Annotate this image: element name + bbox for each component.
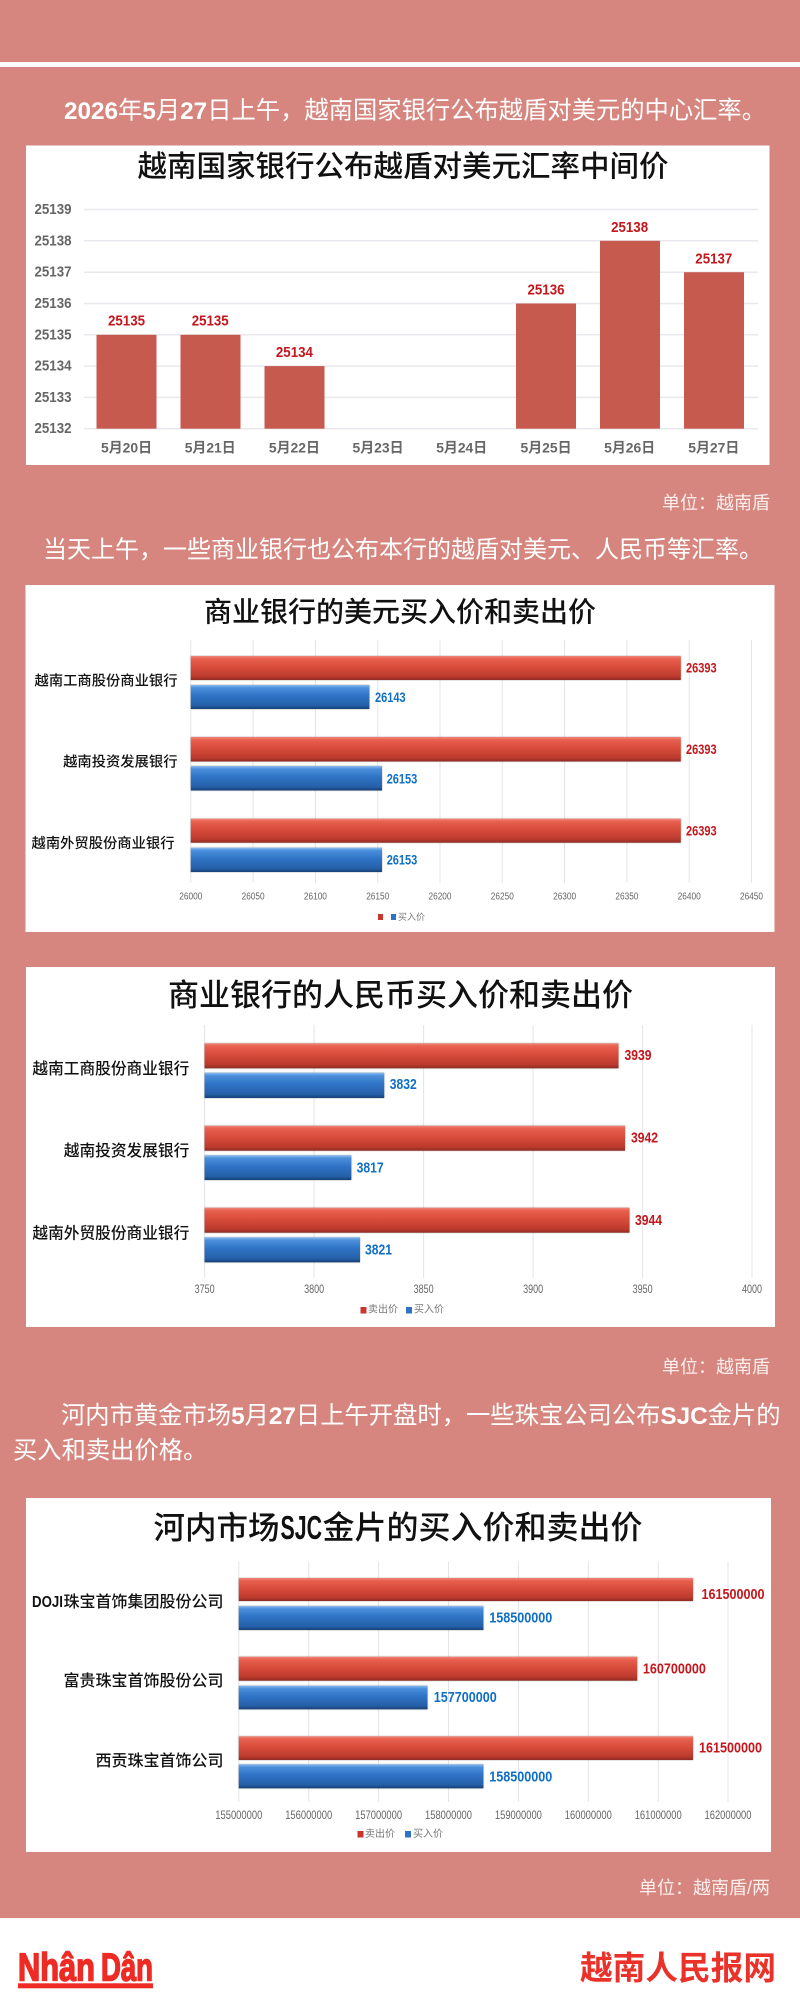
vertical grid lines and x axis: 158000000: [425, 1808, 472, 1822]
vertical grid lines and x axis: 26150: [366, 892, 390, 902]
vertical grid lines and x axis: 161000000: [635, 1808, 682, 1822]
heading: chart 4 title: 河内市场: [154, 1510, 280, 1546]
row: Vietcombank RMB: 3944: [635, 1213, 662, 1229]
vertical grid lines and x axis: 3950: [633, 1282, 653, 1296]
vertical grid lines and x axis: 26000: [179, 892, 203, 902]
vertical grid lines and x axis: 162000000: [704, 1808, 752, 1822]
row: Vietcombank USD: 26393: [686, 824, 717, 838]
panel: SJC gold buy and sell chart: [26, 1498, 771, 1852]
panel: central rate column chart: [26, 146, 770, 465]
heading: chart 1 title: 越南国家银行公布越盾对美元汇率中间价: [137, 150, 669, 184]
row: VietinBank RMB: 越南工商股份商业银行: [32, 1060, 190, 1078]
row: DOJI gold: 珠宝首饰集团股份公司: [63, 1592, 224, 1611]
row: VietinBank RMB: 3939: [624, 1048, 652, 1064]
y axis with grid lines: 25137: [34, 264, 72, 281]
row: Phu Quy gold: 157700000: [434, 1690, 497, 1706]
row: Vietcombank USD: 26153: [387, 852, 418, 868]
panel: USD buy and sell chart: [26, 585, 774, 932]
unit note 3: 单位：越南盾/两: [639, 1878, 770, 1898]
row: BIDV USD: [63, 737, 717, 790]
vertical grid lines and x axis: 26300: [553, 892, 576, 902]
row: VietinBank RMB: 3832: [390, 1077, 417, 1093]
heading: chart 3 title: 商业银行的人民币买入价和卖出价: [168, 978, 633, 1013]
row: Saigon Jewelry gold: 158500000: [489, 1769, 552, 1785]
unit note 1: 单位：越南盾: [662, 493, 770, 513]
row: Phu Quy gold: 160700000: [643, 1661, 706, 1677]
vertical grid lines and x axis: 160000000: [565, 1808, 612, 1822]
x axis dates: 5月23日: [352, 440, 404, 456]
vertical grid lines and x axis: 3850: [414, 1282, 434, 1296]
row: DOJI gold: 161500000: [702, 1587, 764, 1603]
vertical grid lines and x axis: 26100: [304, 892, 327, 902]
row: BIDV USD: 26153: [387, 772, 418, 786]
row: Vietcombank USD: [32, 819, 717, 872]
bars and value labels: 25138: [611, 219, 648, 236]
row: Vietcombank USD: 越南外贸股份商业银行: [32, 835, 174, 852]
row: VietinBank RMB: [32, 1043, 651, 1098]
vertical grid lines and x axis: 157000000: [355, 1808, 402, 1822]
unit note 2: 单位：越南盾: [662, 1357, 770, 1377]
vertical grid lines and x axis: [195, 1025, 762, 1296]
vertical grid lines and x axis: 3800: [304, 1282, 324, 1296]
row: Phu Quy gold: 富贵珠宝首饰股份公司: [63, 1671, 224, 1690]
row: VietinBank USD: 越南工商股份商业银行: [35, 673, 178, 690]
legend: [358, 1827, 443, 1840]
y axis with grid lines: 25138: [34, 232, 72, 249]
panel: RMB buy and sell chart: [26, 967, 775, 1327]
row: Vietcombank RMB: 3821: [365, 1243, 392, 1259]
vertical grid lines and x axis: 26250: [491, 892, 514, 902]
row: DOJI gold: DOJI: [32, 1594, 63, 1611]
y axis with grid lines: 25132: [34, 420, 72, 437]
vertical grid lines and x axis: 3900: [523, 1282, 543, 1296]
bars and value labels: [96, 219, 744, 429]
x axis dates: 5月25日: [520, 440, 572, 456]
row: BIDV RMB: 越南投资发展银行: [64, 1142, 190, 1160]
vertical grid lines and x axis: 26450: [740, 892, 763, 902]
heading: chart 2 title: 商业银行的美元买入价和卖出价: [204, 596, 596, 628]
vertical grid lines and x axis: 26400: [678, 892, 701, 902]
paragraph: SJC gold: [13, 1402, 781, 1464]
bars and value labels: 25135: [108, 312, 145, 330]
vertical grid lines and x axis: 26350: [615, 892, 639, 902]
x axis dates: 5月20日: [101, 440, 152, 456]
vertical grid lines and x axis: 155000000: [215, 1808, 263, 1822]
legend: 卖出价: [365, 1827, 395, 1840]
vertical grid lines and x axis: 159000000: [495, 1808, 542, 1822]
footer band: [0, 1918, 800, 2000]
row: BIDV USD: 26393: [686, 742, 717, 757]
bars and value labels: 25134: [276, 344, 313, 361]
legend: 买入价: [413, 1828, 443, 1840]
legend: 卖出价: [368, 1302, 398, 1316]
legend: [378, 912, 425, 922]
heading: chart 4 title: 金片的买入价和卖出价: [322, 1510, 643, 1546]
x axis dates: 5月27日: [688, 440, 739, 456]
row: Vietcombank RMB: [32, 1208, 662, 1262]
y axis with grid lines: 25133: [34, 389, 72, 406]
y axis with grid lines: 25134: [34, 358, 72, 375]
row: BIDV USD: 越南投资发展银行: [63, 754, 178, 771]
footer site name: 越南人民报网: [580, 1950, 776, 1986]
vertical grid lines and x axis: 26200: [428, 892, 452, 902]
bars and value labels: 25137: [695, 250, 732, 267]
y axis with grid lines: [34, 201, 758, 437]
vertical grid lines and x axis: 3750: [195, 1282, 215, 1296]
y axis with grid lines: 25135: [34, 326, 72, 343]
x axis dates: 5月24日: [436, 440, 487, 456]
paragraph: SJC gold: 买入和卖出价格。: [13, 1438, 207, 1464]
vertical grid lines and x axis: 156000000: [285, 1808, 332, 1822]
x axis dates: 5月21日: [185, 440, 236, 456]
x axis dates: [101, 440, 739, 456]
row: Saigon Jewelry gold: 西贡珠宝首饰公司: [95, 1751, 224, 1770]
y axis with grid lines: 25136: [34, 295, 72, 312]
row: DOJI gold: [32, 1578, 764, 1630]
heading: chart 4 title: [154, 1509, 643, 1546]
logo: Nhan Dan: Dân: [101, 1946, 153, 1990]
row: VietinBank USD: 26143: [375, 690, 406, 705]
row: Vietcombank RMB: 越南外贸股份商业银行: [32, 1224, 190, 1242]
row: Saigon Jewelry gold: [95, 1736, 762, 1788]
vertical grid lines and x axis: 4000: [742, 1282, 762, 1296]
vertical grid lines and x axis: [215, 1562, 752, 1822]
vertical grid lines and x axis: 26050: [242, 892, 265, 902]
logo: Nhan Dan: Nhân: [18, 1946, 95, 1990]
row: VietinBank USD: 26393: [686, 660, 717, 676]
x axis dates: 5月26日: [604, 440, 655, 456]
vertical grid lines and x axis: [179, 640, 763, 902]
bars and value labels: 25135: [192, 312, 229, 330]
x axis dates: 5月22日: [269, 440, 320, 456]
legend: 买入价: [414, 1304, 444, 1316]
legend: 买入价: [398, 912, 425, 922]
legend: [360, 1302, 444, 1316]
paragraph: commercial banks: 当天上午，一些商业银行也公布本行的越盾对美元、人民币等汇率。: [43, 536, 763, 564]
paragraph: SJC gold: 河内市黄金市场5月27日上午开盘时，一些珠宝公司公布SJC金片的: [61, 1402, 781, 1430]
bars and value labels: 25136: [528, 282, 564, 298]
row: BIDV RMB: [64, 1126, 658, 1180]
row: Saigon Jewelry gold: 161500000: [699, 1741, 762, 1757]
heading: chart 4 title: SJC: [280, 1509, 322, 1546]
row: BIDV RMB: 3942: [631, 1131, 658, 1147]
row: BIDV RMB: 3817: [357, 1160, 384, 1176]
intro paragraph: central rate: 2026年5月27日上午，越南国家银行公布越盾对美元的中心汇率。: [64, 98, 766, 124]
y axis with grid lines: 25139: [34, 201, 72, 218]
row: VietinBank USD: [35, 656, 717, 709]
row: Phu Quy gold: [63, 1657, 706, 1709]
row: DOJI gold: 158500000: [489, 1610, 552, 1626]
